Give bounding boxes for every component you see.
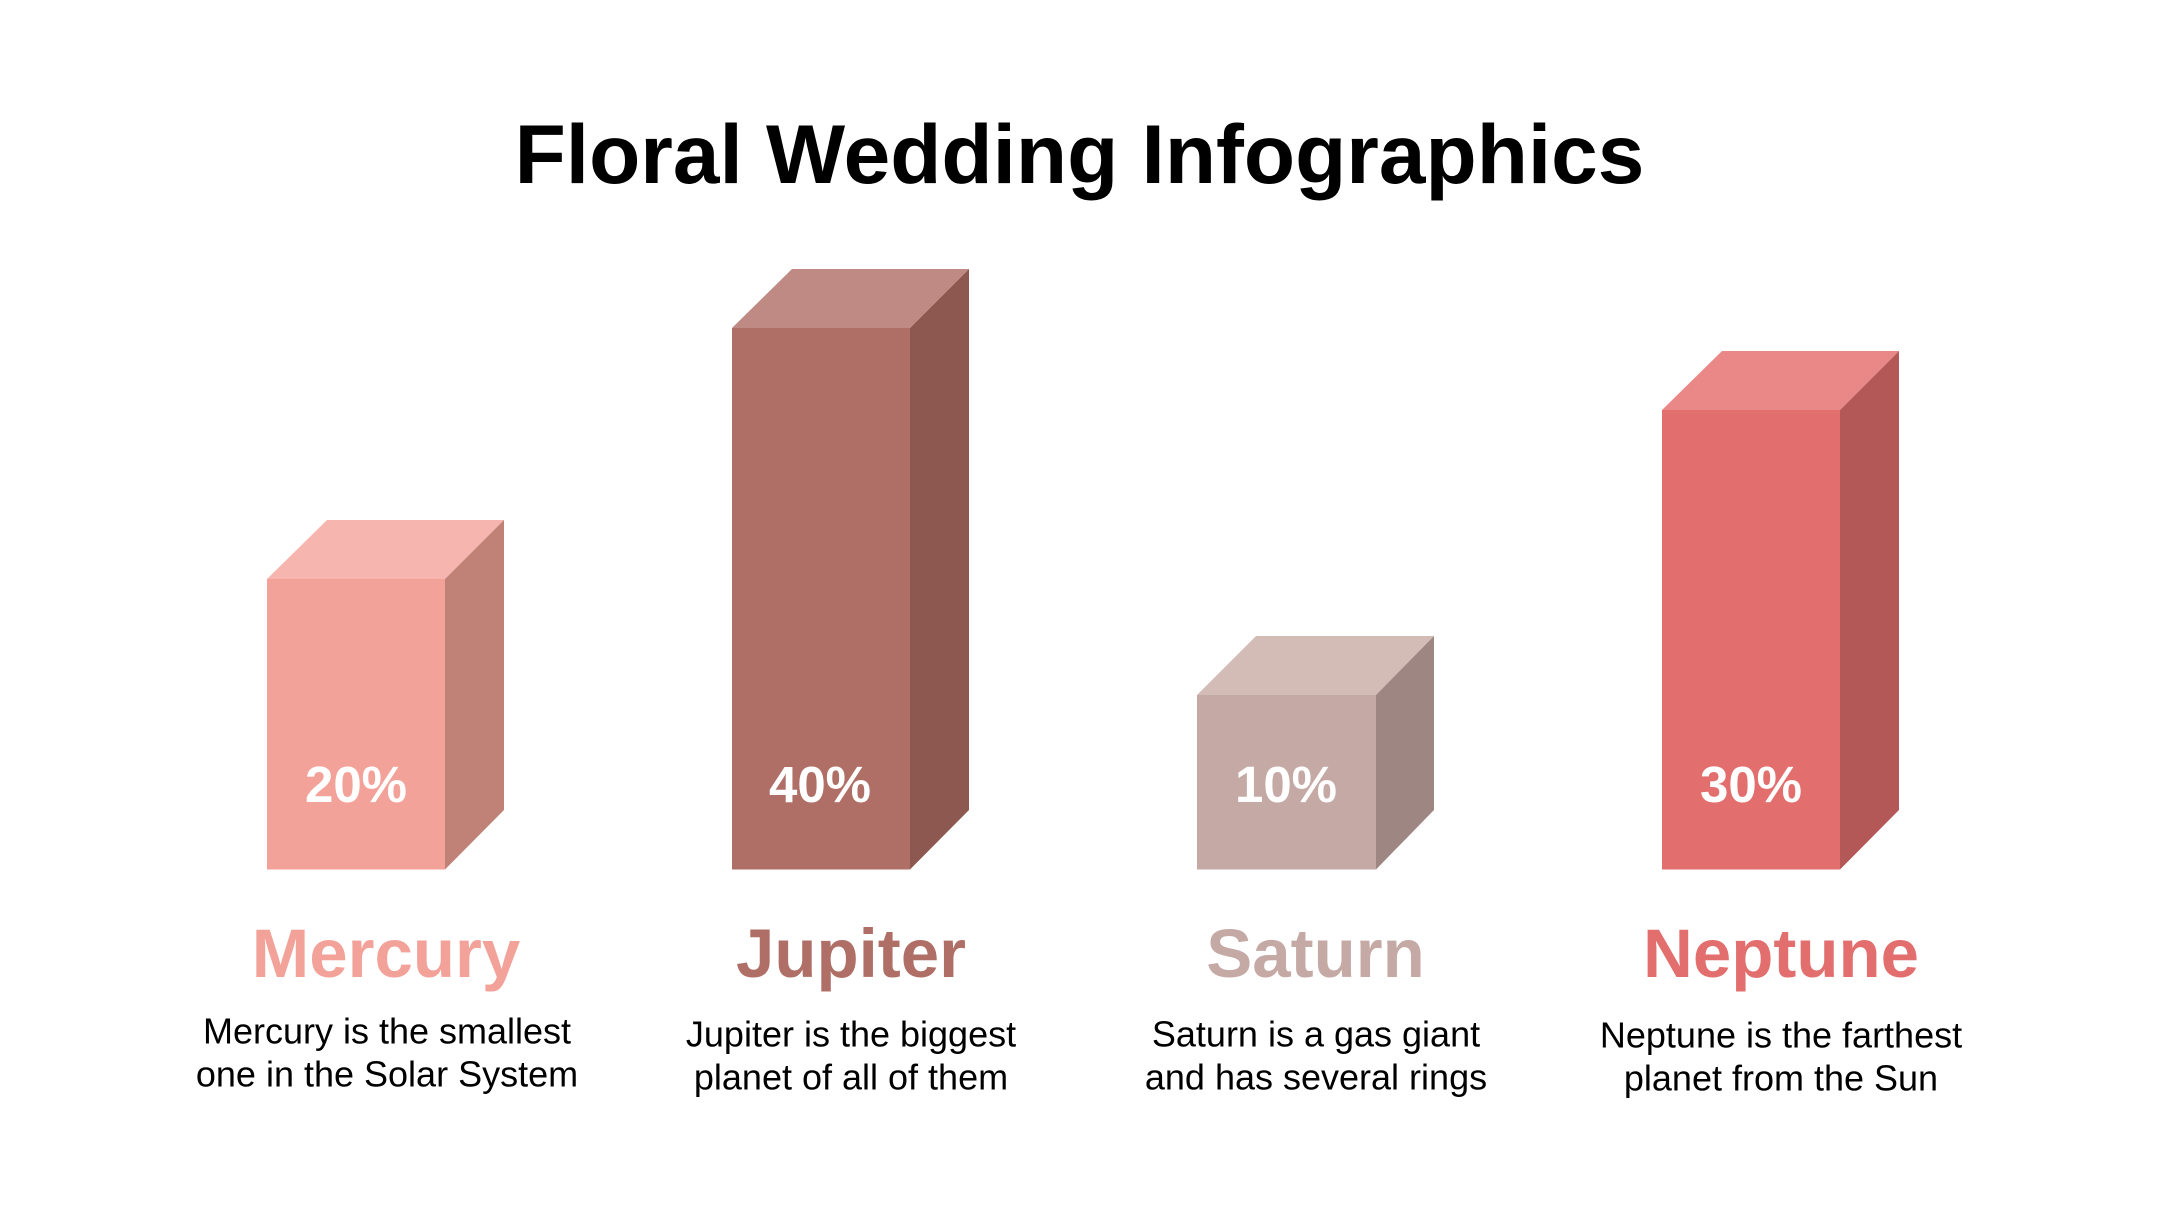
value: 10%: 10% [1235,756,1337,813]
heading: Neptune: Neptune [1643,915,1919,992]
description: Saturn: and has several rings [1145,1056,1487,1098]
value: 20%: 20% [305,756,407,813]
heading: Mercury: Mercury [252,915,520,992]
heading: Jupiter: Jupiter [736,915,966,992]
description: Jupiter: planet of all of them [694,1056,1008,1098]
title: Floral Wedding Infographics [515,107,1644,201]
description: Neptune: planet from the Sun [1624,1058,1938,1098]
description: Neptune: Neptune is the farthest [1600,1014,1962,1056]
value: 30%: 30% [1700,756,1802,813]
panel: Mercury [196,520,578,1094]
bar: Neptune 3D column [1662,351,1899,870]
panel: Jupiter [686,269,1016,1098]
description: Saturn: Saturn is a gas giant [1152,1014,1480,1054]
value: 40%: 40% [769,756,871,813]
description: Jupiter: Jupiter is the biggest [686,1014,1016,1054]
bar: Saturn 3D column [1197,636,1434,870]
bar: Jupiter 3D column [732,269,969,870]
panel: Neptune [1600,351,1962,1098]
description: Mercury: one in the Solar System [196,1054,578,1094]
heading: Saturn: Saturn [1206,915,1425,992]
description: Mercury: Mercury is the smallest [203,1010,571,1052]
bar: Mercury 3D column [267,520,504,870]
panel: Saturn [1145,636,1487,1098]
